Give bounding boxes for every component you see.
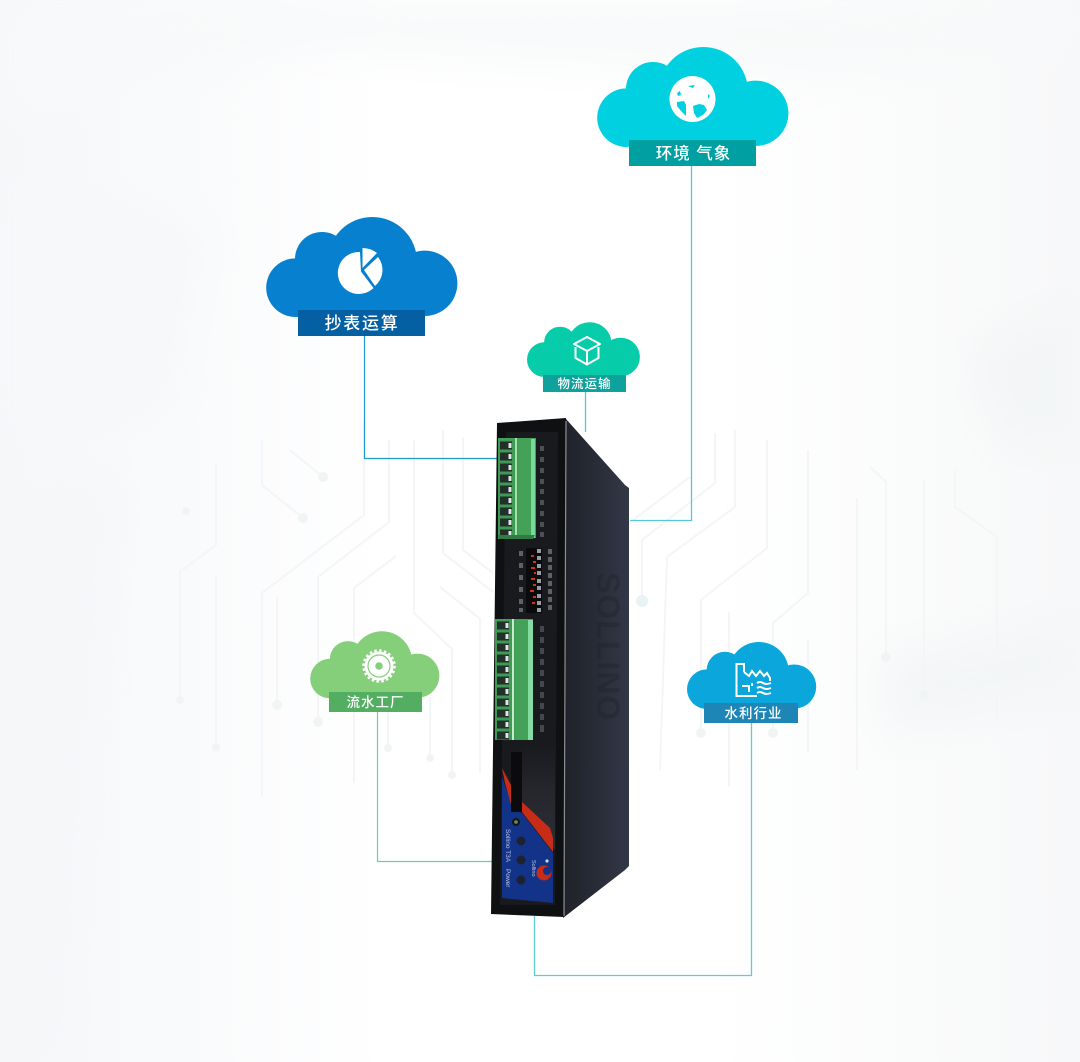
top terminal block <box>498 438 536 539</box>
connector line: water <box>534 723 752 976</box>
cloud: environment and weather <box>597 47 788 166</box>
connector line: environment <box>630 166 692 520</box>
brand logo <box>536 859 552 880</box>
power label: Power <box>504 869 511 888</box>
terminal labels bottom <box>540 626 544 732</box>
antenna port <box>512 818 520 826</box>
device side panel <box>563 419 629 918</box>
label text: factory: 流水工厂 <box>346 695 404 710</box>
LED indicator block <box>519 548 552 613</box>
device side embossed logo: SOLLINO <box>590 572 626 721</box>
label text: environment: 环境 气象 <box>656 143 731 163</box>
device front face <box>491 418 566 917</box>
cloud: assembly-line factory <box>310 631 439 712</box>
device: serial server <box>491 418 629 918</box>
connector line: meter reading <box>364 336 498 458</box>
connector line: logistics <box>584 392 586 432</box>
icon: factory and water <box>736 664 771 696</box>
terminal labels top <box>540 446 544 537</box>
cloud: logistics <box>527 322 640 392</box>
label text: meter reading: 抄表运算 <box>325 314 399 333</box>
icon: pie chart <box>338 248 382 294</box>
label bar: water <box>704 703 798 723</box>
label bar: logistics <box>543 375 626 392</box>
icon: globe <box>670 76 716 122</box>
cloud: meter reading <box>266 217 457 336</box>
icon: box <box>574 337 600 364</box>
cloud: water industry <box>687 642 816 723</box>
buttons <box>516 836 526 884</box>
bottom terminal block <box>495 619 533 740</box>
circuit traces background <box>176 420 997 797</box>
label bar: factory <box>329 692 422 712</box>
blue brand panel <box>502 777 553 903</box>
label bar: meter reading <box>298 310 425 336</box>
red stripe <box>502 768 553 852</box>
connector line: factory <box>378 712 496 862</box>
label text: water: 水利行业 <box>724 706 782 721</box>
lower slate panel <box>522 745 555 850</box>
product name: Sollino T3A <box>504 829 511 863</box>
SIM card slot <box>511 752 522 812</box>
label bar: environment <box>629 140 756 166</box>
icon: gear <box>364 650 394 682</box>
label text: logistics: 物流运输 <box>557 376 612 391</box>
brand text: Sollino <box>530 860 536 877</box>
